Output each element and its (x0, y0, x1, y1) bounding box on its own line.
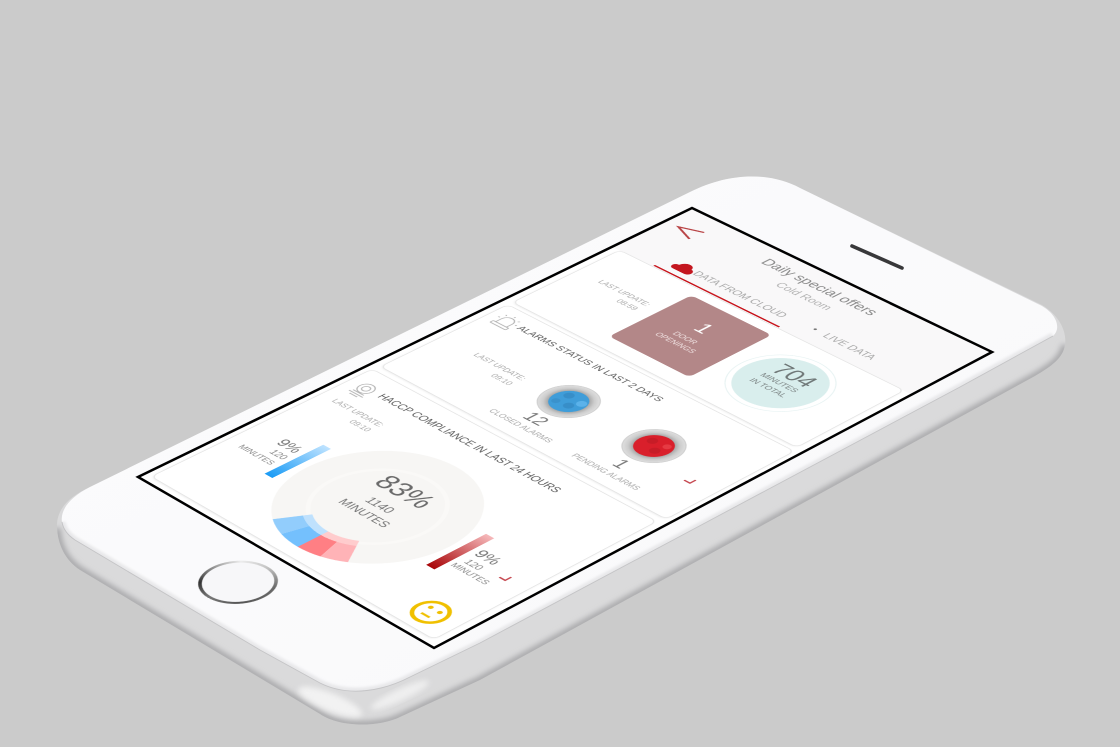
tab: live data: LIVE DATA (820, 332, 879, 361)
panel: door openings card (513, 251, 903, 447)
in total label: IN TOTAL (746, 377, 789, 399)
home button (198, 560, 278, 604)
panel: HACCP compliance card (152, 369, 656, 639)
minutes value: 704 (765, 361, 825, 391)
red bar (426, 534, 494, 569)
red minutes value: 120 (461, 558, 486, 572)
compliance minutes value: 1140 (361, 495, 399, 515)
header band (612, 208, 992, 395)
blue bar (265, 445, 331, 478)
panel: alarms status card (381, 305, 793, 519)
pending alarms label: PENDING ALARMS (569, 452, 643, 491)
closed alarms label: CLOSED ALARMS (487, 408, 555, 444)
blue percent: 9% (272, 437, 307, 455)
door openings tile (609, 295, 772, 377)
icon: cloud (670, 264, 694, 275)
minutes total circle (701, 343, 860, 424)
icon: expand chevron (684, 480, 696, 484)
screen subtitle: Cold Room (772, 281, 836, 312)
blue minutes label: MINUTES (235, 443, 277, 466)
tab dot (813, 328, 818, 330)
tab: data from cloud: DATA FROM CLOUD (690, 270, 790, 319)
icon: back arrow (676, 226, 705, 240)
red minutes label: MINUTES (448, 562, 492, 586)
alarms heading: ALARMS STATUS IN LAST 2 DAYS (514, 325, 666, 403)
speaker (852, 246, 902, 268)
icon: HACCP badge (348, 384, 376, 398)
door label: DOOR (670, 331, 700, 345)
last update label: LAST UPDATE: (330, 398, 387, 428)
glass front face (62, 176, 1057, 691)
donut chart (272, 451, 484, 564)
pending alarms indicator (621, 429, 687, 463)
screen title: Daily special offers (757, 257, 882, 317)
last update time: 09:10 (488, 372, 515, 387)
last update time: 09:10 (346, 419, 374, 433)
silver side (57, 176, 1065, 725)
compliance minutes label: MINUTES (335, 497, 395, 529)
icon: alarm light (490, 314, 520, 330)
closed alarm count: 12 (517, 410, 553, 428)
app screen (138, 208, 992, 648)
last update label: LAST UPDATE: (471, 352, 528, 382)
pending alarm count: 1 (607, 457, 635, 471)
door count: 1 (687, 321, 719, 337)
phone body (57, 176, 1066, 724)
last update label: LAST UPDATE: (596, 279, 653, 307)
icon: neutral smiley (409, 600, 452, 624)
minutes label: MINUTES (757, 372, 801, 394)
HACCP heading: HACCP COMPLIANCE IN LAST 24 HOURS (375, 393, 563, 494)
last update time: 08:59 (613, 298, 640, 312)
compliance percentage: 83% (366, 472, 443, 512)
blue minutes value: 120 (266, 448, 290, 461)
closed alarms indicator (536, 385, 601, 418)
openings label: OPENINGS (653, 331, 698, 354)
active tab underline (653, 265, 781, 327)
red percent: 9% (470, 547, 507, 567)
icon: expand chevron (447, 576, 512, 614)
